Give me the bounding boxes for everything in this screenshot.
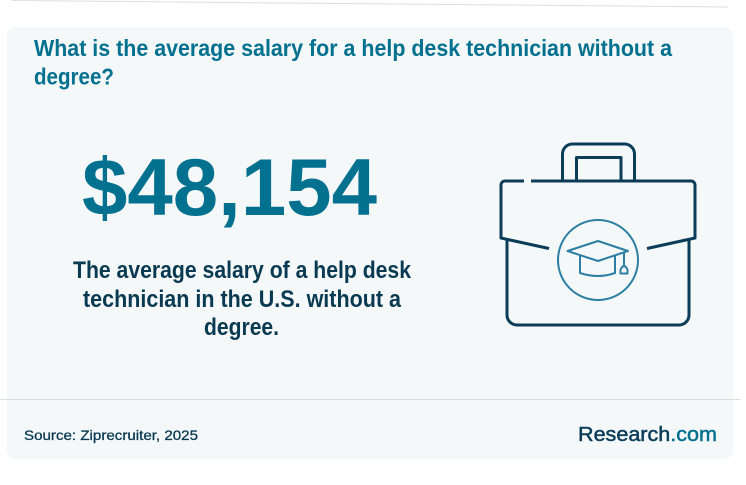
salary description bbox=[73, 257, 412, 341]
title: degree? bbox=[34, 64, 114, 90]
salary description: degree. bbox=[204, 314, 279, 341]
source note: Source: Ziprecruiter, 2025 bbox=[24, 427, 198, 443]
title: What is the average salary for a help desk technician without a bbox=[34, 35, 672, 61]
logo: Research.com: Research.com bbox=[578, 423, 717, 446]
title bbox=[34, 35, 672, 90]
icon: graduation cap badge bbox=[558, 220, 638, 300]
salary description: technician in the U.S. without a bbox=[83, 286, 402, 313]
salary description: The average salary of a help desk bbox=[73, 257, 412, 284]
icon: briefcase with graduation cap bbox=[501, 144, 695, 325]
salary figure: $48,154 bbox=[82, 143, 377, 233]
